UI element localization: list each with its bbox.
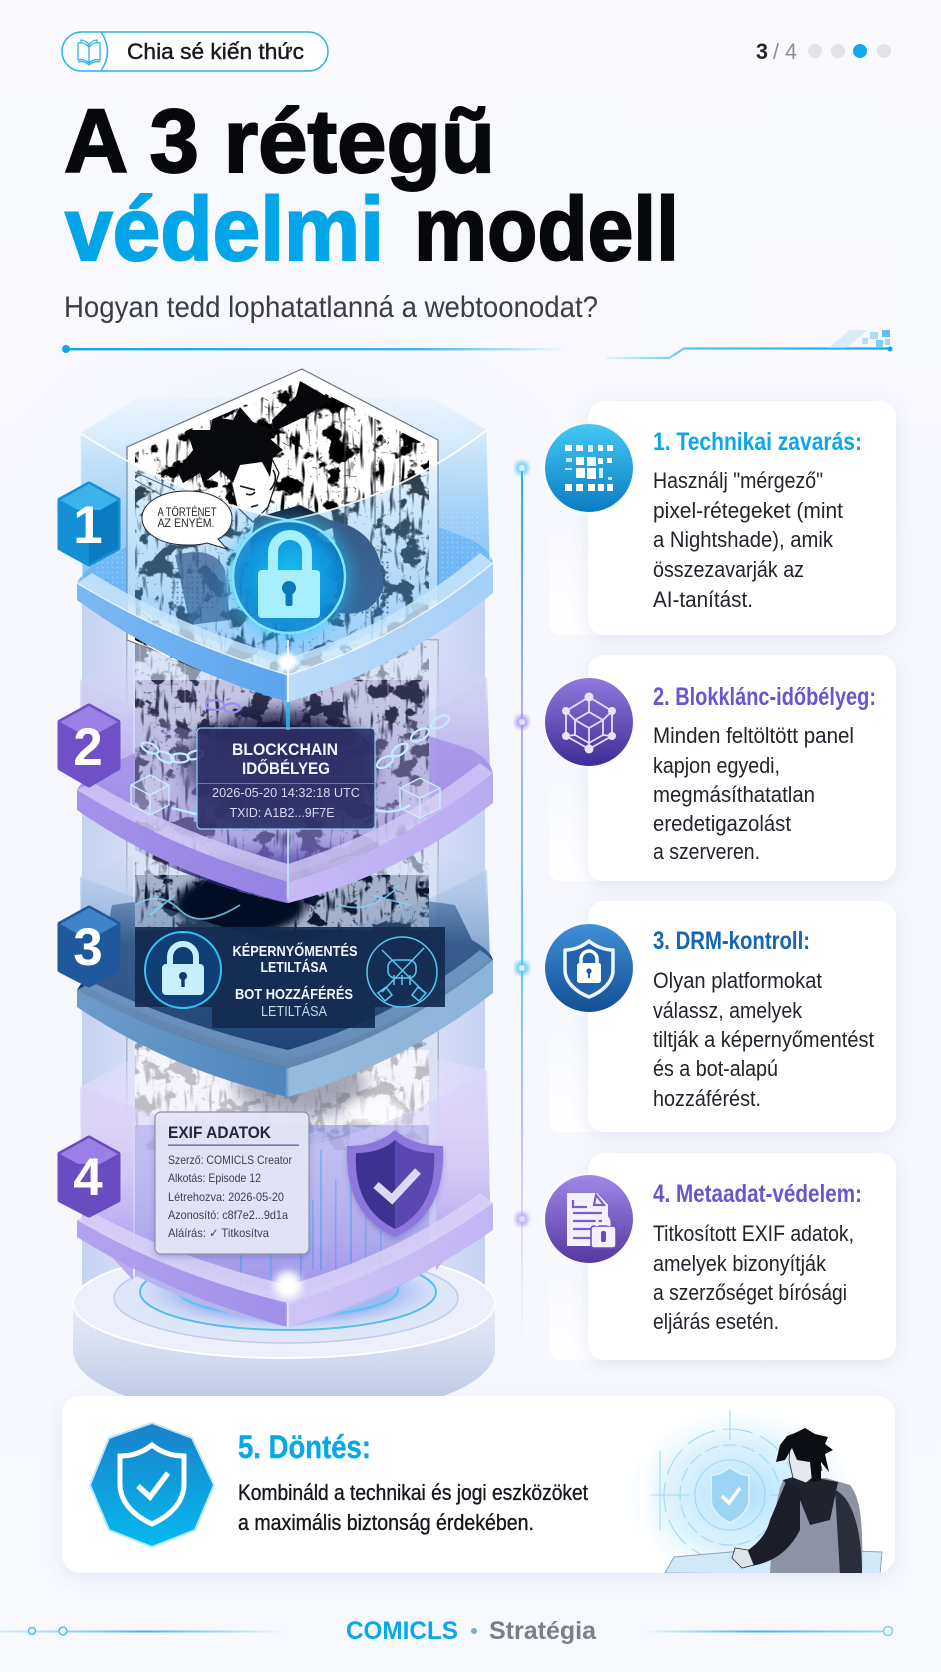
step badge 2: 2 [73,718,103,777]
step badge 3 [60,908,118,985]
manga panel fragment 2 [127,680,438,908]
panel: blockchain timestamp: 2026-05-20 14:32:18 UTC [212,786,360,800]
card 1: technical disruption: összezavarják az [653,557,804,582]
card 1: technical disruption: pixel-rétegeket (mint [653,498,843,523]
icon: shield with lock [544,923,634,1013]
card 3: DRM control: tiltják a képernyőmentést [653,1027,874,1052]
pedestal base [73,1248,495,1420]
step badge 1 [60,484,118,564]
panel: DRM restrictions [135,927,445,1028]
tablet [664,1550,882,1573]
hologram shield [711,1467,749,1523]
step badge 4: 4 [73,1148,103,1207]
badge: knowledge sharing: Chia sé kiến thức [127,39,304,64]
card 2: blockchain timestamp: 2. Blokklánc-időbélyeg: [653,683,876,711]
panel: decision: a maximális biztonság érdekében. [238,1510,534,1535]
card 1: technical disruption: 1. Technikai zavarás: [653,428,862,456]
title: védelmi [65,180,384,280]
manga panel fragment 4 [127,1050,438,1340]
card 3: DRM control [544,901,896,1132]
panel: decision: Kombináld a technikai és jogi eszközöket [238,1480,588,1505]
step badge 4 [60,1138,118,1215]
icon: right node cube [400,778,440,818]
card 2: blockchain timestamp: megmásíthatatlan [653,782,815,807]
data card: EXIF: Szerző: COMICLS Creator [168,1153,292,1167]
icon: open book [78,40,100,65]
panel: blockchain timestamp: BLOCKCHAIN [232,740,338,759]
card 2: blockchain timestamp: a szerveren. [653,839,760,864]
icon: decision shield [90,1423,214,1547]
manga artwork [135,381,429,702]
badge: knowledge sharing [62,32,328,71]
card 2: blockchain timestamp: Minden feltöltött panel [653,723,854,748]
data card: EXIF [155,1112,309,1254]
panel: DRM restrictions: LETILTÁSA [260,959,328,976]
layer 2: blockchain [77,655,493,908]
data card: EXIF: Létrehozva: 2026-05-20 [168,1190,284,1204]
panel: blockchain timestamp: IDŐBÉLYEG [242,759,330,778]
data card: EXIF: Azonosító: c8f7e2...9d1a [168,1208,288,1222]
card 1: technical disruption: Használj "mérgező" [653,468,823,493]
panel: blockchain timestamp [197,728,375,829]
front glass wall [80,430,490,665]
manga panel frame [127,369,438,700]
footer: COMICLS [346,1617,458,1645]
layer 1: technical disruption [77,368,493,730]
chains and nodes [140,700,451,825]
card 3: DRM control: hozzáférést. [653,1086,761,1111]
icon: pixel grid [544,423,634,513]
panel: DRM restrictions: BOT HOZZÁFÉRÉS [235,986,353,1003]
tower column [82,590,485,1300]
card 4: metadata protection: a szerzőséget bírósági [653,1280,847,1305]
character face [227,455,279,522]
icon: purple shield with check [347,1130,443,1237]
card 2: blockchain timestamp: eredetigazolást [653,811,791,836]
card 3: DRM control: válassz, amelyek [653,998,803,1023]
illustration: creator with hologram shield [639,1410,882,1573]
panel: blockchain timestamp: TXID: A1B2...9F7E [230,806,334,820]
icon: blocked bot [367,937,437,1007]
card 4: metadata protection: amelyek bizonyítják [653,1251,827,1276]
character [732,1428,862,1575]
title: modell [414,180,679,280]
character hair [177,407,283,483]
card 2: blockchain timestamp [544,655,896,881]
tray rim [77,553,493,675]
page indicator: 3 [756,39,768,64]
header divider [62,330,892,358]
continuous manga strip behind the layers [127,640,438,1260]
icon: glowing padlock [227,515,351,639]
card 3: DRM control: és a bot-alapú [653,1056,778,1081]
layer 4: metadata [77,1050,493,1340]
panel: DRM restrictions: KÉPERNYŐMENTÉS [232,942,358,960]
page indicator: / 4 [773,39,797,64]
footer: Stratégia [489,1617,597,1645]
speech bubble [142,491,232,549]
step badge 2 [60,706,118,785]
data card: EXIF: Alkotás: Episode 12 [168,1171,261,1185]
digital rain [240,1150,382,1285]
step badge 3: 3 [73,918,103,977]
card 3: DRM control: 3. DRM-kontroll: [653,927,810,955]
card 1: technical disruption [544,401,896,635]
panel: DRM restrictions: LETILTÁSA [261,1003,327,1020]
card 4: metadata protection: 4. Metaadat-védelem: [653,1180,862,1208]
card 4: metadata protection [544,1153,896,1360]
data card: EXIF: EXIF ADATOK [168,1123,272,1142]
title [64,92,679,280]
title: A 3 rétegũ [64,92,495,192]
step badge 1: 1 [73,496,103,555]
card 4: metadata protection: Titkosított EXIF adatok, [653,1221,854,1246]
speech bubble: A TÖRTÉNET [158,506,216,519]
panel: decision [62,1396,895,1585]
card 1: technical disruption: AI-tanítást. [653,587,753,612]
layer 3: DRM [77,855,493,1100]
data card: EXIF: Aláírás: ✓ Titkosítva [168,1226,269,1240]
card 2: blockchain timestamp: kapjon egyedi, [653,753,780,778]
icon: lock disc [145,932,221,1008]
icon: left node cube [131,775,169,815]
icon: blockchain cube [544,677,634,767]
speech bubble: AZ ENYÉM. [158,517,214,530]
timeline [515,461,529,1348]
illustration: layered protection tower [73,368,495,1420]
subtitle: Hogyan tedd lophatatlanná a webtoonodat? [64,291,598,324]
card 1: technical disruption: a Nightshade), amik [653,527,834,552]
card 4: metadata protection: eljárás esetén. [653,1309,779,1334]
light beam [279,640,297,730]
panel: decision: 5. Döntés: [238,1429,371,1465]
manga panel fragment 3 [127,875,438,1100]
icon: locked document [544,1174,634,1264]
footer [0,1617,892,1645]
card 3: DRM control: Olyan platformokat [653,968,822,993]
page indicator [756,39,891,64]
